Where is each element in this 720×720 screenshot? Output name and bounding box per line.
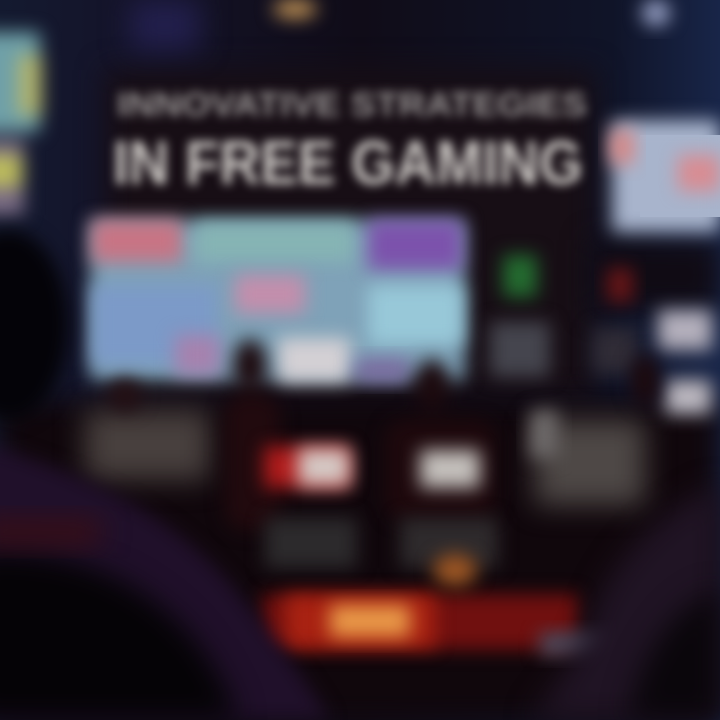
glowing red counter — [262, 554, 635, 656]
red and white logo screens — [264, 446, 480, 488]
stations front row — [265, 518, 498, 568]
headline text: IN FREE GAMING — [113, 129, 583, 198]
left wall screen — [0, 32, 42, 215]
right stacked displays — [658, 310, 712, 414]
main screen — [90, 220, 465, 382]
headline text — [113, 86, 587, 198]
ceiling lights — [273, 0, 670, 26]
stations back row — [85, 410, 645, 505]
headline text: INNOVATIVE STRATEGIES — [117, 86, 587, 124]
right wall screen — [610, 120, 720, 232]
foreground viewer right — [530, 485, 720, 720]
side signal panels — [490, 255, 638, 377]
foreground viewer left — [0, 230, 330, 720]
audience silhouettes — [109, 339, 660, 530]
